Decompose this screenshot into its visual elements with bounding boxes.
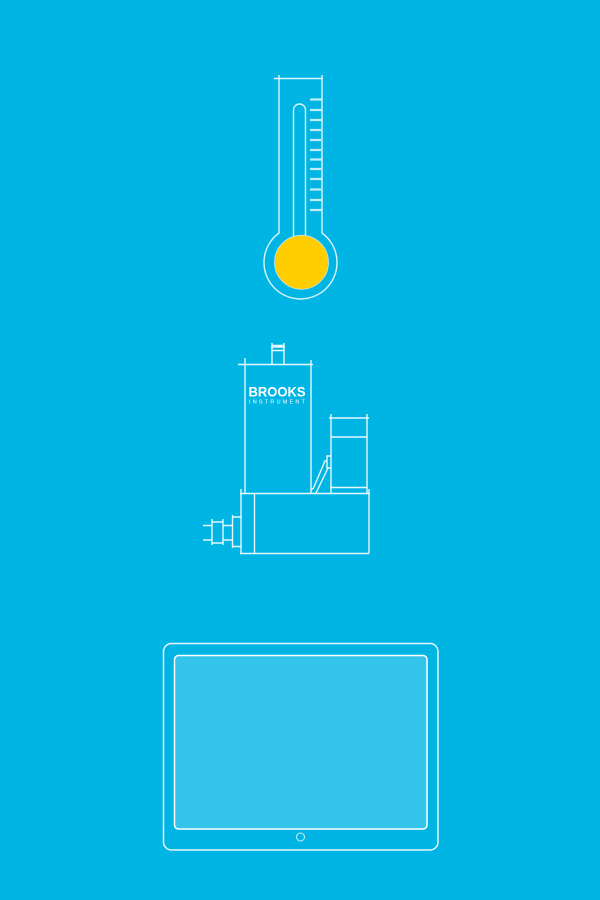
side module (329, 414, 369, 493)
left fittings (203, 515, 241, 548)
icon: Brooks flow controller (203, 343, 370, 554)
tablet screen (174, 656, 427, 829)
thermometer yellow bulb (274, 235, 328, 289)
tablet home button (296, 833, 304, 841)
thermometer body outline (264, 75, 337, 299)
angled bracket (311, 456, 331, 493)
icon: thermometer (264, 75, 337, 299)
icon: tablet (164, 644, 438, 850)
top connector stub (271, 343, 285, 364)
thermometer scale ticks (310, 100, 322, 210)
brand text: BROOKS (248, 385, 306, 400)
brand text: INSTRUMENT (249, 400, 306, 406)
main housing (238, 358, 313, 494)
tablet outer frame (164, 644, 438, 850)
base block (240, 489, 370, 554)
